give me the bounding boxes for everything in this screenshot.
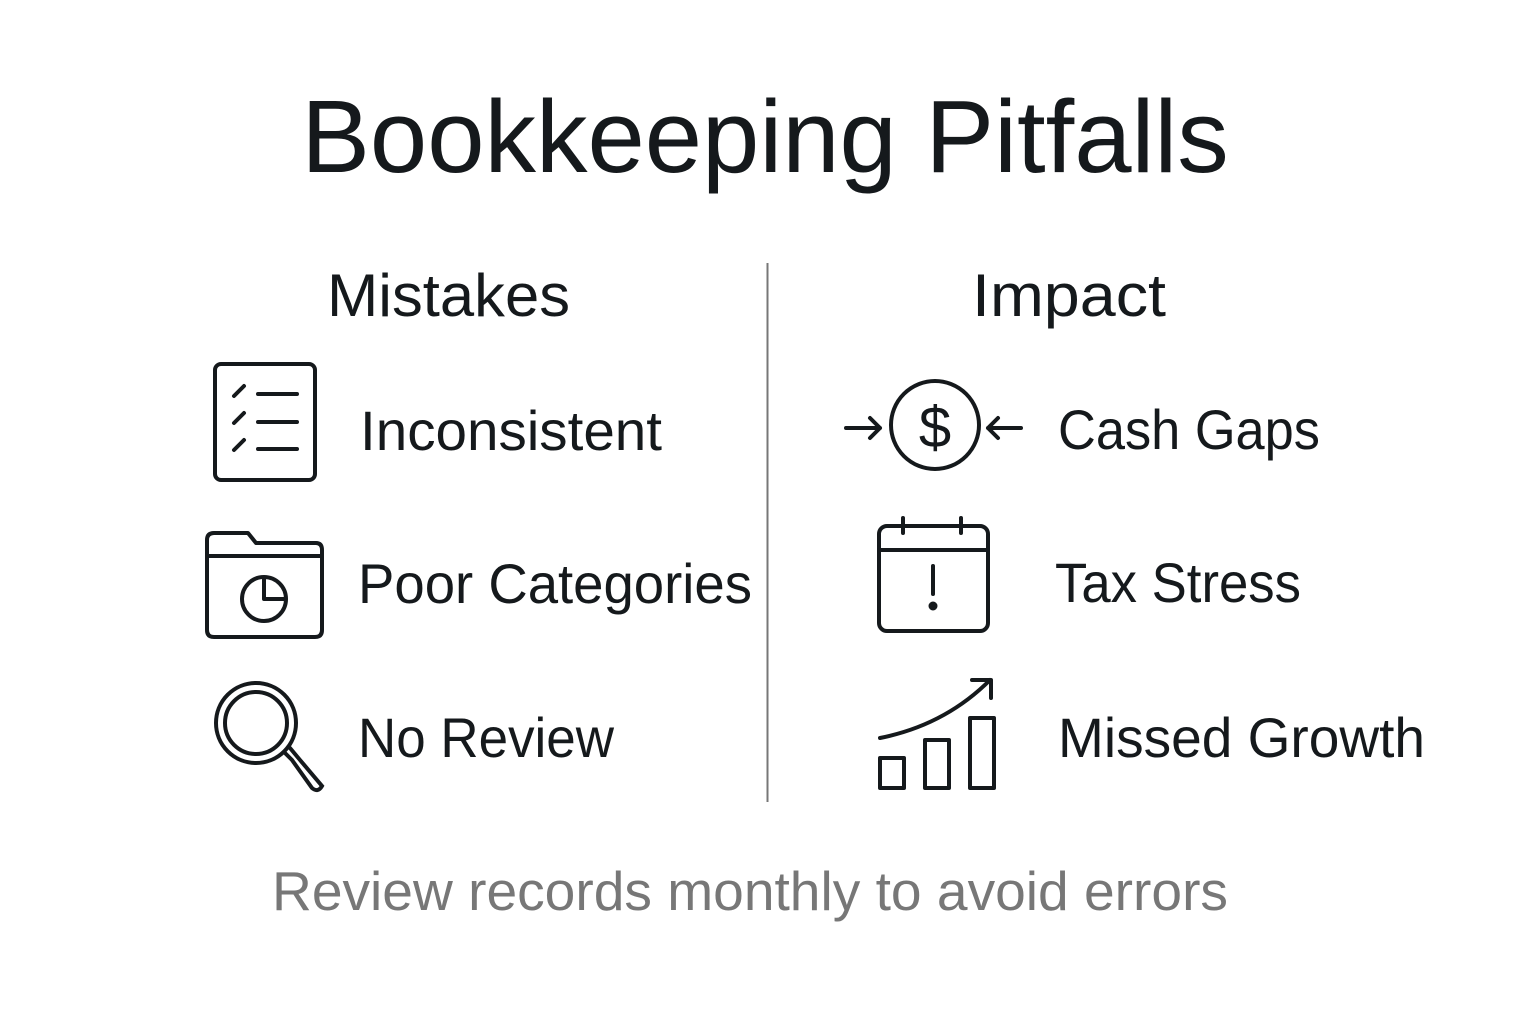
icon: calendar with alert	[879, 518, 988, 631]
panel: impact	[846, 381, 1425, 788]
icon: dollar with arrows	[846, 381, 1021, 469]
text: no review: No Review	[358, 706, 615, 769]
divider line	[766, 263, 768, 802]
text: tax stress: Tax Stress	[1055, 551, 1301, 614]
icon: dollar with arrows: $	[919, 395, 951, 460]
footer note: Review records monthly to avoid errors	[272, 860, 1228, 922]
title: Bookkeeping Pitfalls	[301, 79, 1229, 194]
panel: mistakes	[207, 364, 752, 790]
heading: impact: Impact	[972, 262, 1166, 329]
text: inconsistent: Inconsistent	[360, 399, 662, 462]
text: poor categories: Poor Categories	[358, 552, 752, 615]
icon: folder with pie chart	[207, 533, 322, 637]
icon: magnifier	[216, 683, 322, 790]
text: missed growth: Missed Growth	[1058, 706, 1425, 769]
icon: checklist	[215, 364, 315, 480]
text: cash gaps: Cash Gaps	[1058, 398, 1320, 461]
icon: growth chart	[880, 680, 994, 788]
heading: mistakes: Mistakes	[327, 262, 570, 329]
